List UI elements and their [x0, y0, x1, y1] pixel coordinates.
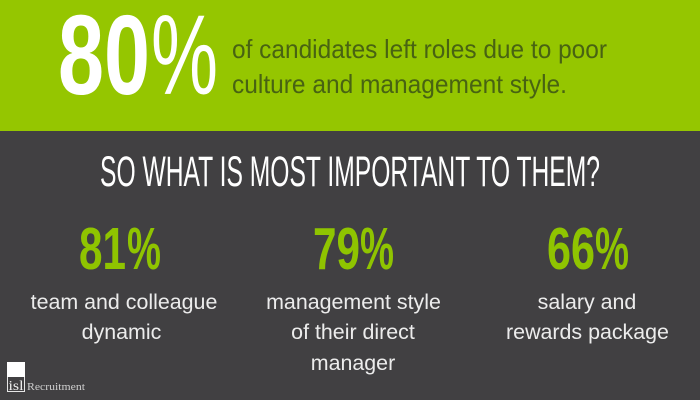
logo: isl Recruitment: isl: [8, 379, 24, 394]
column: salary and rewards: [506, 216, 669, 344]
column: team and colleague dynamic: [31, 216, 217, 344]
panel: green banner: [0, 0, 700, 131]
label: [266, 290, 441, 375]
logo: isl Recruitment: Recruitment: [27, 382, 85, 393]
stat: 66%: %: [595, 216, 629, 282]
label: management style: [266, 290, 441, 314]
logo: isl Recruitment: [7, 362, 85, 394]
label: rewards package: [506, 320, 669, 344]
label: dynamic: [82, 320, 162, 344]
banner text: [232, 34, 607, 99]
stat: 66%: 66: [547, 216, 595, 282]
label: salary and: [538, 290, 636, 314]
stat: 79%: %: [360, 216, 394, 282]
stat: 79%: 79: [313, 216, 360, 282]
banner text: of candidates left roles due to poor: [232, 34, 607, 64]
label: manager: [311, 351, 395, 375]
stat: 81%: 81: [79, 216, 126, 282]
label: [31, 290, 217, 344]
label: of their direct: [291, 320, 415, 344]
column: management style: [266, 216, 441, 375]
label: [506, 290, 669, 344]
stat: 81%: %: [127, 216, 161, 282]
label: team and colleague: [31, 290, 217, 314]
banner text: culture and management style.: [232, 69, 567, 99]
